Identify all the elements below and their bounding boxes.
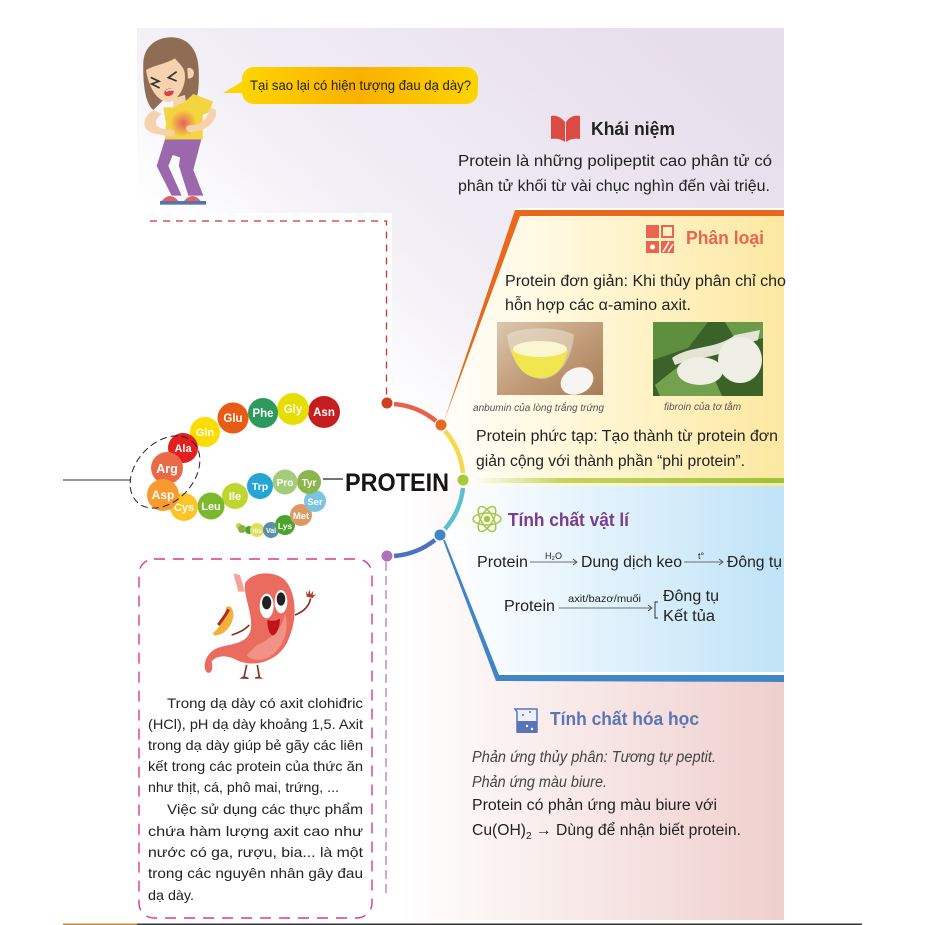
- text: chemical properties: Phản ứng màu biure.: [472, 774, 607, 791]
- equation 2: axit/bazơ/muối: [568, 593, 641, 605]
- amino acid chain: [147, 393, 340, 538]
- amino acid chain: Phe: [252, 408, 274, 420]
- icon: woman with stomach ache: [143, 37, 216, 205]
- photo: silkworm cocoons: [653, 322, 763, 396]
- connector: left line: [63, 479, 131, 481]
- text: chemical properties: 2: [526, 831, 532, 842]
- text: Khái niệm body: Protein là những polipeptit cao phân tử có: [458, 153, 772, 170]
- text: stomach explanation: Trong dạ dày có axit clohiđric: [167, 695, 363, 711]
- speech bubble: [223, 67, 478, 104]
- text: stomach explanation: nước có ga, rượu, bia... là một: [148, 844, 363, 860]
- text: stomach explanation: kết trong các protein của thức ăn: [148, 758, 363, 774]
- heading: Tính chất vật lí: Tính chất vật lí: [508, 509, 630, 530]
- amino acid chain: Leu: [201, 501, 221, 513]
- panel border: blue: [443, 540, 784, 682]
- text: stomach explanation: chứa hàm lượng axit cao như: [148, 823, 363, 839]
- amino acid chain: Pro: [277, 478, 293, 489]
- text: stomach explanation: trong dạ dày giúp bẻ gãy các liên: [148, 737, 363, 753]
- equation 1: Đông tụ: [727, 554, 782, 571]
- equation 2: Đông tụ: [663, 588, 719, 605]
- text: stomach explanation: như thịt, cá, phô mai, trứng, ...: [148, 779, 339, 795]
- equation 2: Protein: [504, 598, 555, 615]
- text: protein phức tạp: [476, 428, 778, 470]
- text: Khái niệm body: phân tử khối từ vài chục nghìn đến vài triệu.: [458, 178, 770, 195]
- bottom rule: [63, 924, 862, 925]
- amino acid chain: Ala: [174, 443, 192, 455]
- icon: book: [551, 116, 580, 142]
- text: stomach explanation: (HCl), pH dạ dày khoảng 1,5. Axit: [148, 716, 363, 732]
- panel: Phân loại: [442, 208, 784, 486]
- text: protein phức tạp: giản cộng với thành phần “phi protein”.: [476, 453, 745, 470]
- text: stomach explanation: dạ dày.: [148, 887, 194, 903]
- connector: red dashed: [150, 221, 386, 398]
- text: protein đơn giản: hỗn hợp các α-amino axit.: [505, 297, 691, 314]
- hub arc with nodes: [382, 398, 468, 562]
- bubble text: Tại sao lại có hiện tượng đau dạ dày?: [250, 77, 471, 93]
- equation 1: Protein: [477, 554, 528, 571]
- connector to title: [323, 478, 343, 480]
- text: chemical properties: Protein có phản ứng màu biure với: [472, 797, 717, 814]
- text: stomach explanation: [148, 695, 363, 903]
- text: protein phức tạp: Protein phức tạp: Tạo thành từ protein đơn: [476, 428, 778, 445]
- photo: egg white: [497, 322, 603, 400]
- amino acid chain: Tyr: [302, 478, 317, 489]
- text: protein đơn giản: [505, 273, 786, 314]
- caption: anbumin: anbumin của lòng trắng trứng: [473, 401, 604, 414]
- text: Khái niệm body: [458, 153, 772, 195]
- background panel: bottom pink: [400, 480, 784, 920]
- amino acid chain: Met: [293, 511, 310, 522]
- amino acid chain: Cys: [174, 502, 194, 514]
- amino acid chain: Trp: [252, 481, 268, 493]
- panel border: orange: [443, 210, 784, 424]
- amino acid chain: Ser: [307, 497, 323, 508]
- heading: Khái niệm: Khái niệm: [591, 118, 675, 139]
- connector: purple dashed: [385, 562, 387, 895]
- icon: cartoon stomach: [205, 573, 316, 679]
- title: PROTEIN: PROTEIN: [345, 469, 449, 497]
- text: chemical properties: [472, 749, 741, 842]
- equation 1: H₂O: [545, 551, 562, 561]
- heading: Tính chất hóa học: Tính chất hóa học: [550, 708, 699, 729]
- amino acid chain: Asp: [152, 488, 174, 502]
- amino acid chain: Gln: [196, 427, 214, 439]
- legs: [157, 139, 203, 196]
- caption: fibroin: fibroin của tơ tằm: [664, 400, 741, 413]
- text: protein đơn giản: Protein đơn giản: Khi thủy phân chỉ cho: [505, 273, 786, 290]
- amino acid chain: Asn: [313, 407, 335, 419]
- amino acid chain: His: [252, 529, 262, 535]
- green divider: [470, 478, 784, 483]
- equation 2: Kết tủa: [663, 608, 715, 625]
- panel: Tính chất vật lí: [443, 486, 784, 682]
- background: white left column: [137, 213, 392, 920]
- amino acid chain: Ile: [229, 491, 241, 503]
- icon: beaker: [515, 709, 537, 733]
- text: chemical properties: Phản ứng thủy phân: Tương tự peptit.: [472, 749, 716, 766]
- text: stomach explanation: Việc sử dụng các thực phẩm: [167, 801, 363, 817]
- background panel: top lavender: [137, 28, 784, 478]
- panel: stomach note: [139, 559, 372, 918]
- amino acid chain: Gly: [284, 404, 303, 416]
- amino acid chain: Val: [266, 528, 276, 535]
- text: chemical properties: Cu(OH): [472, 822, 525, 839]
- icon: atom: [473, 504, 501, 534]
- equation 1: Dung dịch keo: [581, 554, 682, 571]
- text: stomach explanation: trong các nguyên nhân gây đau: [148, 865, 363, 881]
- dashed ellipse around Ala Arg Asp: [116, 422, 214, 522]
- text: chemical properties: → Dùng để nhận biết protein.: [532, 822, 741, 839]
- amino acid chain: Lys: [278, 521, 292, 531]
- amino acid chain: Arg: [156, 462, 178, 476]
- icon: categories: [646, 225, 674, 253]
- equation 1: [477, 551, 782, 571]
- heading: Phân loại: Phân loại: [686, 227, 764, 248]
- equation 1: t°: [698, 551, 705, 561]
- equation 2: [504, 588, 719, 625]
- amino acid chain: Glu: [223, 413, 243, 425]
